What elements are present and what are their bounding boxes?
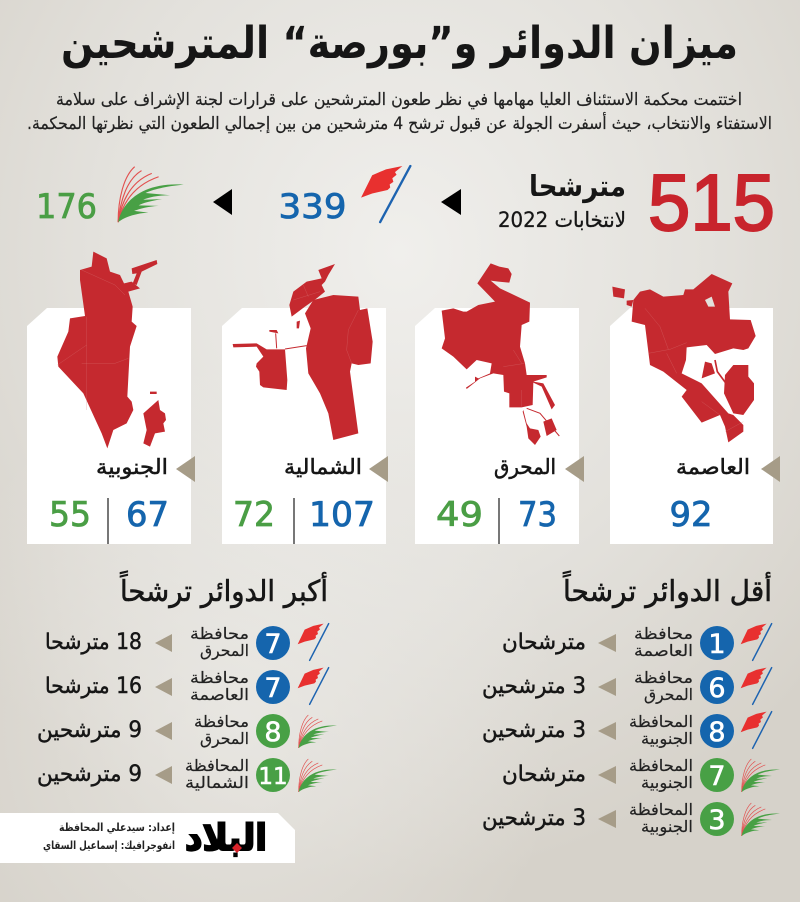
list row: district 11 northern 9 candidates: المحافظة [185,756,249,775]
list row: district 8 southern: 3 مترشحين [482,718,586,743]
list row: district 8 muharraq 9 candidates: محافظة [194,712,249,731]
list row: district 6 muharraq: المحرق [644,685,693,705]
list row: district 1 capital: العاصمة [634,641,693,660]
list row: district 8 muharraq 9 candidates: 8 [264,717,282,748]
map: southern [57,252,166,448]
red group: 339: 339 [278,187,346,227]
list row: district 8 southern: 8 [708,717,726,748]
candidates label [498,169,626,232]
list row: district 1 capital: محافظة [634,624,693,643]
intro paragraph: الاستفتاء والانتخاب، حيث أسفرت الجولة عن قبول ترشح 4 مترشحين من بين إجمالي الطعون التي نظرتها المحكمة. [27,112,772,134]
list row: district 3 southern: المحافظة [629,800,693,819]
label: capital: العاصمة [676,455,750,479]
list row: district 6 muharraq: محافظة [634,668,693,687]
map: northern [233,264,373,440]
list row: district 7 southern: 7 [708,761,726,792]
list row: district 8 southern: الجنوبية [641,729,693,749]
pointer [369,456,388,482]
list row: district 7 muharraq 18 candidates [45,624,329,661]
count: blue: 73 [518,495,557,535]
pointer [565,456,584,482]
label: southern: الجنوبية [96,455,168,479]
list row: district 8 muharraq 9 candidates [37,712,337,749]
intro paragraph [27,90,772,134]
arrow [213,189,232,215]
count: 92: 92 [670,495,712,535]
list row: district 6 muharraq [482,668,772,705]
count: green: 49 [436,495,483,535]
label: northern: الشمالية [284,455,362,479]
list row: district 7 capital 16 candidates: 7 [264,673,282,704]
count: green: 55 [49,495,91,535]
list row: district 1 capital: 1 [708,629,726,660]
panel: southern governorate [27,252,195,544]
list row: district 7 muharraq 18 candidates: 7 [264,629,282,660]
intro paragraph: اختتمت محكمة الاستئناف العليا مهامها في نظر طعون المترشحين على قرارات لجنة الإشراف على سلامة [56,90,742,110]
list row: district 11 northern 9 candidates [37,756,337,792]
list row: district 8 southern: المحافظة [629,712,693,731]
footer credit panel [0,813,295,863]
list row: district 7 capital 16 candidates: 16 مترشحا [45,674,142,699]
map: capital [612,274,756,442]
arrow [441,189,461,215]
divider [293,498,295,544]
list row: district 11 northern 9 candidates: 11 [258,764,288,790]
list row: district 7 muharraq 18 candidates: محافظة [190,624,249,643]
list row: district 6 muharraq: 6 [708,673,726,704]
list row: district 3 southern: 3 مترشحين [482,806,586,831]
panel: northern governorate [222,264,388,544]
candidates label: مترشحا [529,169,626,203]
count: green: 72 [233,495,275,535]
list row: district 7 southern [502,756,780,793]
list row: district 3 southern: الجنوبية [641,817,693,837]
list row: district 7 southern: مترشحان [502,762,586,787]
red group: 339 [278,166,410,227]
pointer [761,456,780,482]
panel: capital governorate [610,274,780,544]
green group: 176: 176 [36,187,97,227]
panel: muharraq governorate [415,263,584,544]
list row: district 7 southern: المحافظة [629,756,693,775]
total candidates 515: 515 [648,158,775,247]
divider [107,498,109,544]
list row: district 7 capital 16 candidates [45,668,329,704]
green group: 176 [36,167,184,227]
list row: district 8 muharraq 9 candidates: المحرق [200,729,249,749]
list row: district 3 southern: 3 [708,805,726,836]
list row: district 7 southern: الجنوبية [641,773,693,793]
pointer [176,456,195,482]
list row: district 6 muharraq: 3 مترشحين [482,674,586,699]
map: muharraq [442,263,559,445]
list row: district 7 muharraq 18 candidates: 18 مترشحا [45,630,142,655]
label: muharraq: المحرق [494,455,556,479]
credits: إعداد: سيدعلي المحافظة [59,821,175,834]
list row: district 1 capital [502,624,772,660]
list row: district 7 capital 16 candidates: العاصمة [190,685,249,704]
list row: district 8 southern [482,712,772,749]
count: blue: 107 [309,495,375,535]
count: blue: 67 [126,495,169,535]
credits: انفوجرافيك: إسماعيل السقاي [43,839,175,852]
heading: lowest candidacy districts: أقل الدوائر ترشحاً [563,571,772,608]
list row: district 7 capital 16 candidates: محافظة [190,668,249,687]
divider [498,498,500,544]
list row: district 7 muharraq 18 candidates: المحرق [200,641,249,661]
logo: البلاد [185,818,267,859]
heading: highest candidacy districts: أكبر الدوائر ترشحاً [120,571,328,608]
list row: district 1 capital: مترشحان [502,630,586,655]
candidates label: لانتخابات 2022 [498,208,626,232]
credits [43,821,175,852]
list row: district 8 muharraq 9 candidates: 9 مترشحين [37,718,142,743]
list row: district 3 southern [482,800,780,837]
list row: district 11 northern 9 candidates: الشمالية [185,773,249,792]
list row: district 11 northern 9 candidates: 9 مترشحين [37,762,142,787]
